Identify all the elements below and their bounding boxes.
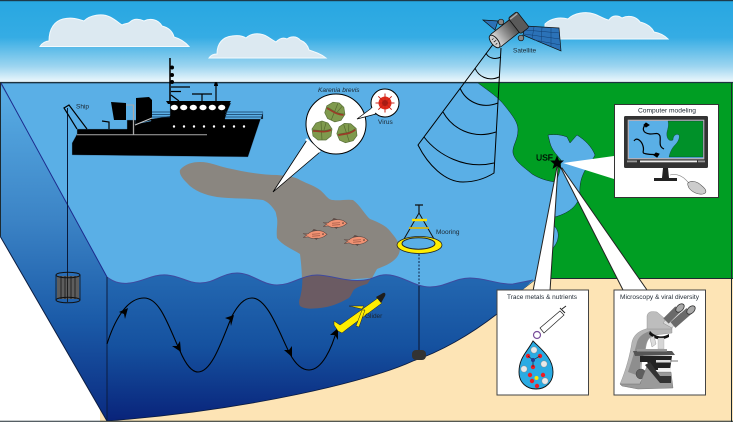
sea-land horizon line xyxy=(0,82,733,84)
sky xyxy=(0,0,733,83)
icon: microscope xyxy=(620,302,697,389)
USF star xyxy=(550,156,564,169)
callout: virus bubble xyxy=(357,89,399,119)
icon: monitor xyxy=(624,116,708,181)
panel: microscopy and viral diversity xyxy=(614,290,706,395)
satellite xyxy=(483,11,561,52)
panel: trace metals and nutrients xyxy=(497,290,588,395)
mooring xyxy=(397,205,442,360)
ocean side face xyxy=(0,83,107,421)
label: Karenia brevis: Karenia brevis xyxy=(318,87,360,94)
fish school xyxy=(303,217,368,247)
icon: water droplet xyxy=(519,341,553,389)
wave line xyxy=(107,273,533,287)
rosette sampler xyxy=(56,108,80,303)
ocean front face xyxy=(107,273,533,421)
label: mooring: Mooring xyxy=(436,229,460,236)
bay xyxy=(548,135,595,217)
land xyxy=(470,83,733,278)
heading: trace metals: Trace metals & nutrients xyxy=(507,294,578,301)
heading: computer modeling: Computer modeling xyxy=(638,108,696,114)
callout beam: computer modeling xyxy=(563,156,614,179)
sea surface xyxy=(0,83,558,290)
algal bloom xyxy=(180,162,400,282)
callout beam: microscopy xyxy=(561,168,647,290)
glider path with arrows xyxy=(107,298,338,372)
satellite beam xyxy=(418,43,501,182)
callout: Karenia brevis bubble xyxy=(273,94,366,192)
cloud: middle xyxy=(209,34,326,58)
icon: syringe xyxy=(534,306,566,338)
callout beam: trace metals xyxy=(533,167,558,291)
bloom below the water surface xyxy=(299,276,370,309)
cloud: left xyxy=(40,15,189,46)
label: ship: Ship xyxy=(76,104,89,110)
label: virus: Virus xyxy=(378,119,393,126)
label: glider: Glider xyxy=(365,313,383,320)
panel: computer modeling xyxy=(614,104,718,198)
label: satellite: Satellite xyxy=(513,48,537,54)
sand xyxy=(100,278,733,422)
cloud: right xyxy=(545,13,668,39)
glider xyxy=(334,293,385,333)
heading: microscopy: Microscopy & viral diversity xyxy=(620,294,700,301)
icon: mouse xyxy=(670,174,706,194)
label: USF: USF xyxy=(536,152,553,162)
ship xyxy=(64,58,263,157)
